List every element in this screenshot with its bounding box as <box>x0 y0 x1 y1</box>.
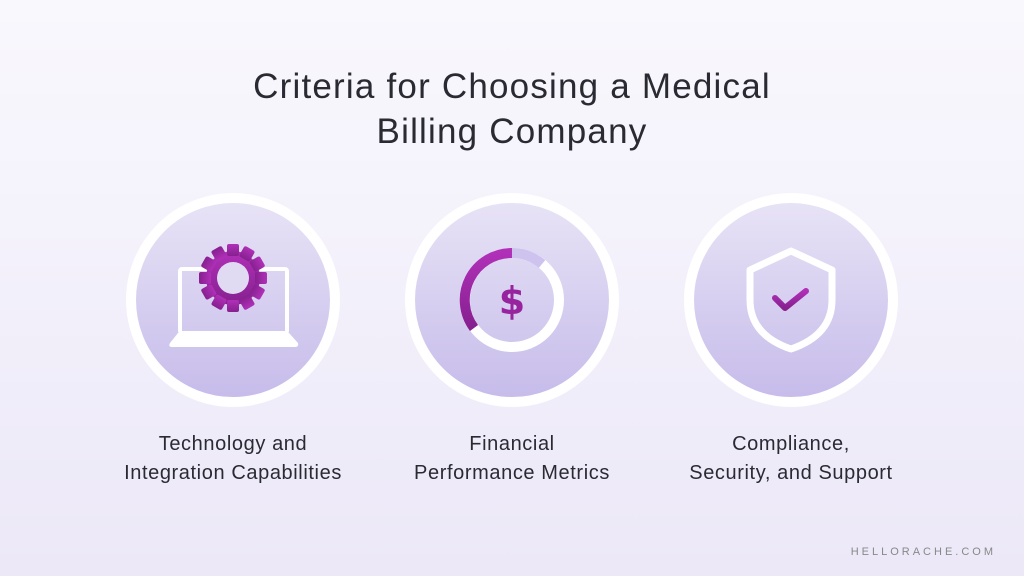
label: financial: Performance Metrics <box>414 462 610 484</box>
panel: technology <box>131 198 335 402</box>
label: compliance <box>689 433 893 484</box>
panel: financial <box>410 198 614 402</box>
icon: gear <box>199 244 267 312</box>
title: Billing Company <box>377 112 647 151</box>
footer: site: HELLORACHE.COM <box>851 546 996 558</box>
panel: financial: $ <box>499 279 525 323</box>
title <box>253 67 771 151</box>
title: Criteria for Choosing a Medical <box>253 67 771 106</box>
panel: compliance <box>689 198 893 402</box>
label: compliance: Compliance, <box>732 433 850 455</box>
label: financial <box>414 433 610 484</box>
label: compliance: Security, and Support <box>689 462 893 484</box>
label: technology <box>124 433 342 484</box>
icon: donut <box>465 253 559 347</box>
label: financial: Financial <box>469 433 555 455</box>
label: technology: Technology and <box>159 433 307 455</box>
icon: laptop <box>180 269 287 333</box>
label: technology: Integration Capabilities <box>124 462 342 484</box>
icon: shield <box>750 251 832 349</box>
